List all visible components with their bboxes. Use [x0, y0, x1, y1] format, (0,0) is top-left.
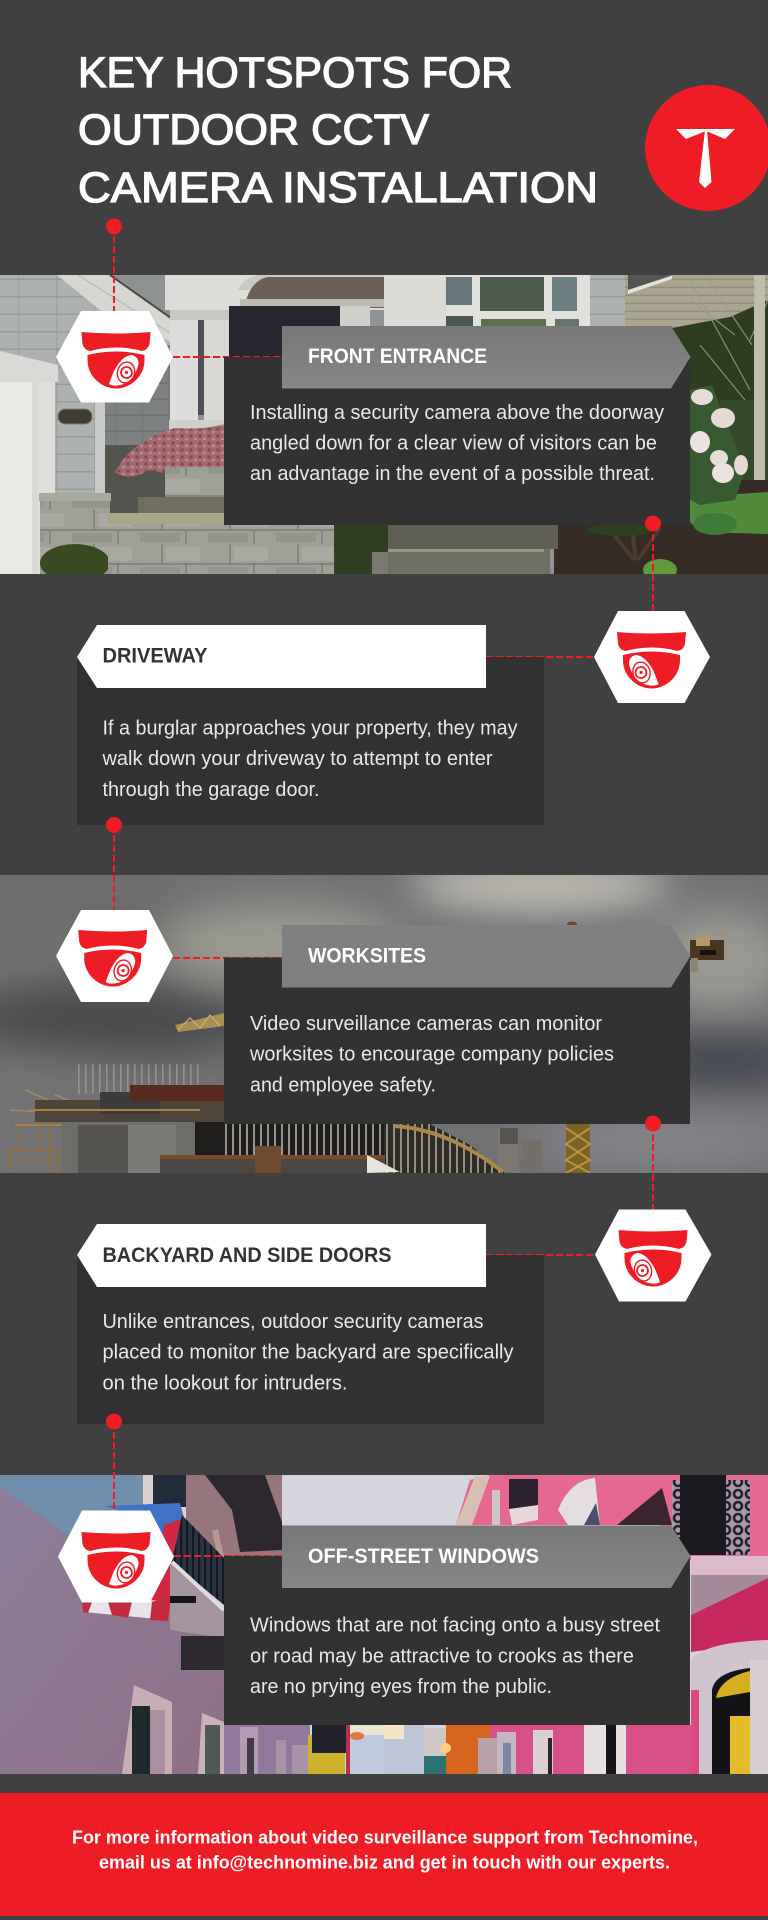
panel: driveway: DRIVEWAY [102, 644, 208, 668]
footer call to action [0, 1793, 768, 1916]
panel: backyard and side doors: placed to monitor the backyard are specifically [102, 1342, 514, 1364]
icon: camera hexagon, backyard [595, 1210, 712, 1302]
panel: driveway: If a burglar approaches your property, they may [102, 718, 518, 740]
connector dots [106, 218, 661, 1430]
panel: backyard and side doors: Unlike entrances, outdoor security cameras [102, 1311, 484, 1333]
panel: front entrance [224, 326, 690, 525]
logo: red circle with white tie T [645, 85, 768, 211]
panel: front entrance: angled down for a clear view of visitors can be [250, 432, 657, 454]
panel: backyard and side doors: BACKYARD AND SIDE DOORS [102, 1244, 392, 1267]
footer call to action: email us at info@technomine.biz and get in touch with our experts. [99, 1852, 670, 1872]
panel: backyard and side doors [77, 1224, 544, 1424]
panel: worksites: Video surveillance cameras can monitor [250, 1013, 602, 1035]
panel: worksites: WORKSITES [308, 944, 426, 968]
footer call to action: For more information about video surveillance support from Technomine, [72, 1828, 698, 1848]
panel: front entrance: FRONT ENTRANCE [308, 345, 487, 368]
panel: driveway: through the garage door. [102, 779, 320, 801]
panel: worksites: worksites to encourage company policies [249, 1044, 614, 1066]
icon: camera hexagon, driveway [594, 611, 710, 703]
panel: driveway [77, 625, 544, 825]
header title: OUTDOOR CCTV [78, 106, 429, 154]
icon: camera hexagon, off-street windows [58, 1510, 174, 1602]
panel: worksites: and employee safety. [250, 1074, 436, 1096]
panel: backyard and side doors: on the lookout for intruders. [102, 1372, 348, 1394]
header title: CAMERA INSTALLATION [78, 164, 598, 212]
panel: off-street windows [224, 1526, 690, 1725]
panel: off-street windows: or road may be attractive to crooks as there [250, 1646, 634, 1668]
panel: off-street windows: are no prying eyes from the public. [250, 1676, 552, 1698]
panel: off-street windows: Windows that are not facing onto a busy street [250, 1614, 660, 1636]
panel: worksites [224, 925, 690, 1124]
panel: front entrance: Installing a security camera above the doorway [250, 402, 664, 424]
photo: house front entrance [0, 275, 768, 582]
panel: off-street windows: OFF-STREET WINDOWS [308, 1545, 539, 1568]
photo: construction site under stormy sky [0, 857, 768, 1173]
icon: camera hexagon, worksites [56, 910, 173, 1002]
photo: colourful colonial street [0, 1475, 768, 1774]
icon: camera hexagon, front entrance [56, 311, 173, 402]
dashed connector lines [114, 226, 653, 1556]
header title: KEY HOTSPOTS FOR [78, 49, 512, 97]
header title [78, 49, 598, 212]
panel: driveway: walk down your driveway to attempt to enter [102, 748, 493, 770]
panel: front entrance: an advantage in the event of a possible threat. [250, 463, 655, 485]
